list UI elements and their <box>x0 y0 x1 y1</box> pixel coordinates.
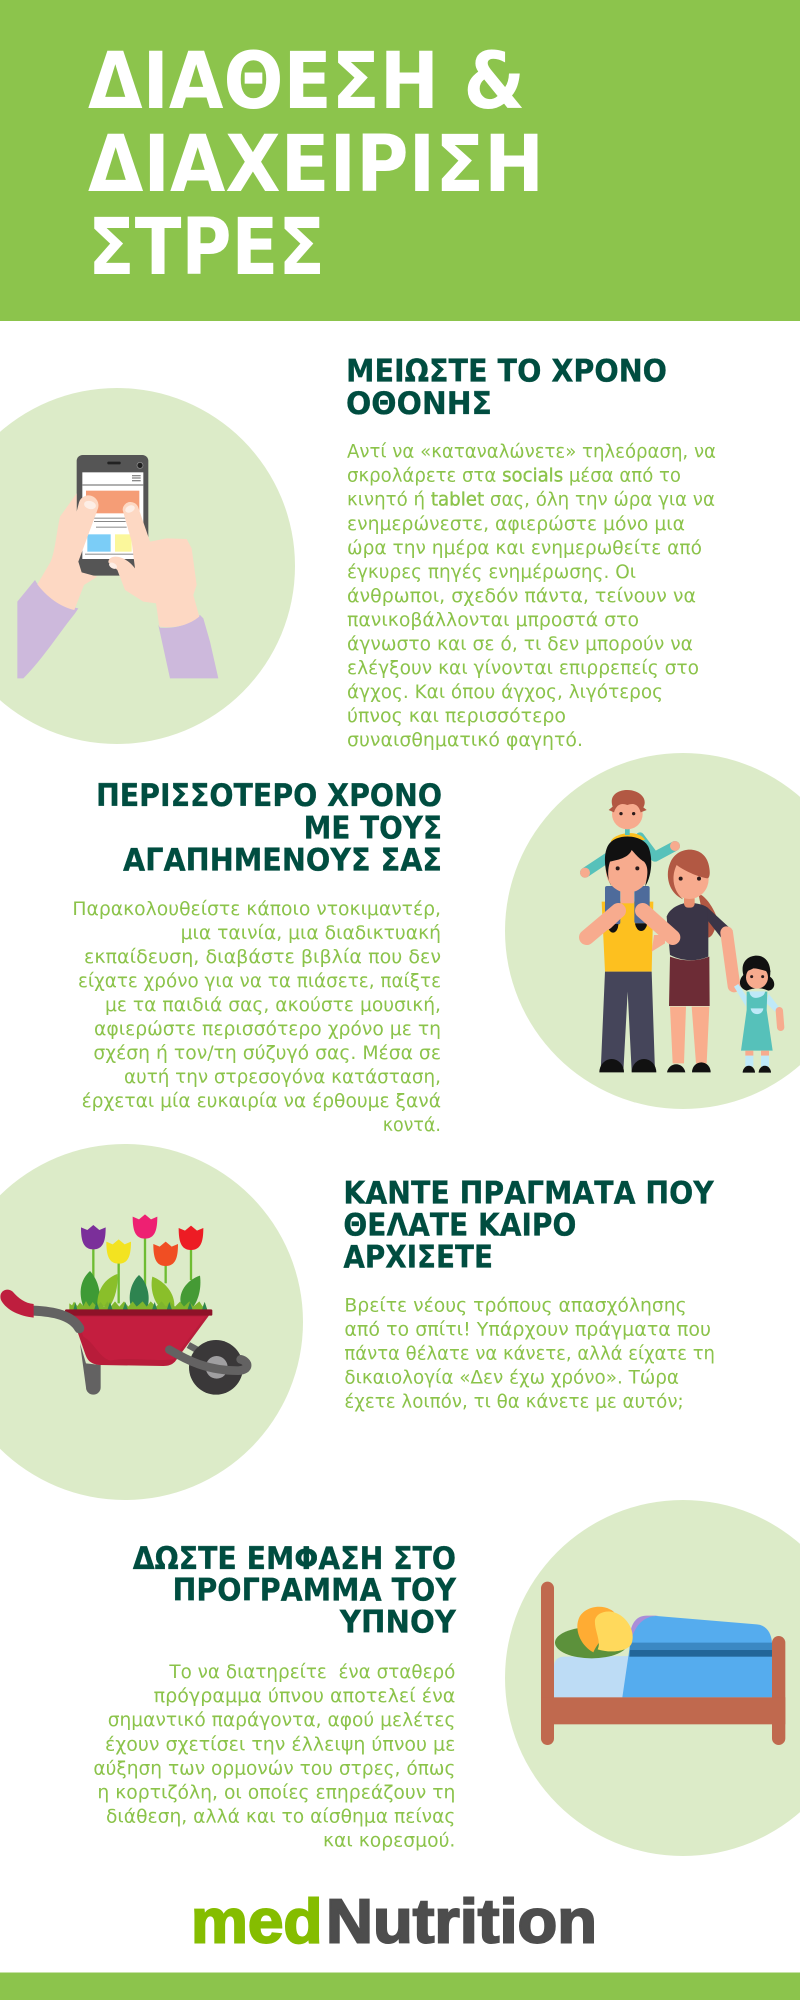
body text: ελέγξουν και γίνονται επιρρεπείς στο <box>347 657 699 679</box>
heading: ΟΘΟΝΗΣ <box>346 386 492 422</box>
heading: ΚΑΝΤΕ ΠΡΑΓΜΑΤΑ ΠΟΥ <box>343 1175 714 1211</box>
green circle backdrop <box>0 1144 303 1500</box>
heading: ΥΠΝΟΥ <box>339 1605 457 1641</box>
body text: έγκυρες πηγές ενημέρωσης. Οι <box>347 561 636 583</box>
body text: σκρολάρετε στα socials μέσα από το <box>347 465 681 487</box>
heading: ΑΓΑΠΗΜΕΝΟΥΣ ΣΑΣ <box>123 843 442 879</box>
body text: ενημερώνεστε, αφιερώστε μόνο μια <box>347 513 685 535</box>
body text: ύπνος και περισσότερο <box>347 705 566 727</box>
body text: με τα παιδιά σας, ακούστε μουσική, <box>105 994 441 1016</box>
body text: η κορτιζόλη, οι οποίες επηρεάζουν τη <box>97 1782 455 1804</box>
body text <box>347 441 716 751</box>
green circle backdrop <box>0 388 295 744</box>
body text: έχουν σχετίσει την έλλειψη ύπνου με <box>105 1733 455 1755</box>
heading <box>96 778 442 879</box>
body text: Το να διατηρείτε ένα σταθερό <box>168 1661 455 1683</box>
header banner with title <box>0 0 800 321</box>
title: ΔΙΑΘΕΣΗ & <box>88 35 525 127</box>
heading: ΜΕ ΤΟΥΣ <box>304 810 442 846</box>
body text: δικαιολογία «Δεν έχω χρόνο». Τώρα <box>344 1367 679 1389</box>
icon: hands holding smartphone <box>17 455 218 678</box>
body text: ώρα την ημέρα και ενημερωθείτε από <box>347 537 702 559</box>
panel: more time with loved ones <box>72 753 800 1136</box>
body text: πάντα θέλατε να κάνετε, αλλά είχατε τη <box>344 1343 715 1365</box>
panel: do the things you wanted to <box>0 1144 715 1500</box>
panel: reduce screen time <box>0 354 716 751</box>
body text: Αντί να «καταναλώνετε» τηλεόραση, να <box>347 441 716 463</box>
heading <box>133 1541 457 1641</box>
body text: κινητό ή tablet σας, όλη την ώρα για να <box>347 489 715 511</box>
body text: πρόγραμμα ύπνου αποτελεί ένα <box>154 1685 455 1707</box>
heading: ΠΡΟΓΡΑΜΜΑ ΤΟΥ <box>172 1573 457 1609</box>
heading <box>346 354 667 422</box>
icon: person sleeping in bed <box>541 1582 785 1745</box>
body text: Βρείτε νέους τρόπους απασχόλησης <box>344 1295 687 1317</box>
body text <box>93 1661 455 1852</box>
green circle backdrop <box>505 1500 800 1856</box>
body text: και κορεσμού. <box>323 1830 455 1852</box>
body text: πανικοβάλλονται μπροστά στο <box>347 609 639 631</box>
body text: συναισθηματικό φαγητό. <box>347 729 583 751</box>
body text: αυτή την στρεσογόνα κατάσταση, <box>124 1066 441 1088</box>
heading: ΔΩΣΤΕ ΕΜΦΑΣΗ ΣΤΟ <box>133 1541 456 1577</box>
icon: family of four <box>580 790 781 1073</box>
body text: σχέση ή τον/τη σύζυγό σας. Μέσα σε <box>93 1042 441 1064</box>
body text: έρχεται μία ευκαιρία να έρθουμε ξανά <box>82 1090 441 1112</box>
body text: άγνωστο και σε ό, τι δεν μπορούν να <box>347 633 693 655</box>
body text <box>344 1295 715 1413</box>
panel: emphasise the sleep schedule <box>93 1500 800 1856</box>
heading <box>343 1175 714 1276</box>
body text: άνθρωποι, σχεδόν πάντα, τείνουν να <box>347 585 696 607</box>
body text: μια ταινία, μια διαδικτυακή <box>181 922 441 944</box>
body text: έχετε λοιπόν, τι θα κάνετε με αυτόν; <box>344 1391 684 1413</box>
title <box>88 35 544 293</box>
body text: αύξηση των ορμονών του στρες, όπως <box>93 1757 455 1779</box>
body text: από το σπίτι! Υπάρχουν πράγματα που <box>344 1319 711 1341</box>
body text: κοντά. <box>383 1114 441 1136</box>
body text: άγχος. Και όπου άγχος, λιγότερος <box>347 681 663 703</box>
green circle backdrop <box>505 753 800 1109</box>
title: ΔΙΑΧΕΙΡΙΣΗ <box>88 118 544 210</box>
logo: medNutrition <box>191 1888 597 1957</box>
body text: σημαντικό παράγοντα, αφού μελέτες <box>108 1709 455 1731</box>
heading: ΜΕΙΩΣΤΕ ΤΟ ΧΡΟΝΟ <box>346 354 667 390</box>
title: ΣΤΡΕΣ <box>88 201 325 293</box>
body text: διάθεση, αλλά και το αίσθημα πείνας <box>106 1806 455 1828</box>
heading: ΠΕΡΙΣΣΟΤΕΡΟ ΧΡΟΝΟ <box>96 778 442 814</box>
heading: ΑΡΧΙΣΕΤΕ <box>343 1240 493 1276</box>
body text <box>72 898 441 1136</box>
body text: Παρακολουθείστε κάποιο ντοκιμαντέρ, <box>72 898 441 920</box>
footer bar <box>0 1972 800 2000</box>
logo: medNutrition: Nutrition <box>326 1888 597 1957</box>
body text: εκπαίδευση, διαβάστε βιβλία που δεν <box>84 946 441 968</box>
logo: medNutrition: med <box>191 1888 322 1957</box>
body text: αφιερώστε περισσότερο χρόνο με τη <box>94 1018 441 1040</box>
heading: ΘΕΛΑΤΕ ΚΑΙΡΟ <box>343 1207 576 1243</box>
body text: είχατε χρόνο για να τα πιάσετε, παίξτε <box>78 970 441 992</box>
icon: wheelbarrow with tulips <box>0 1214 247 1395</box>
